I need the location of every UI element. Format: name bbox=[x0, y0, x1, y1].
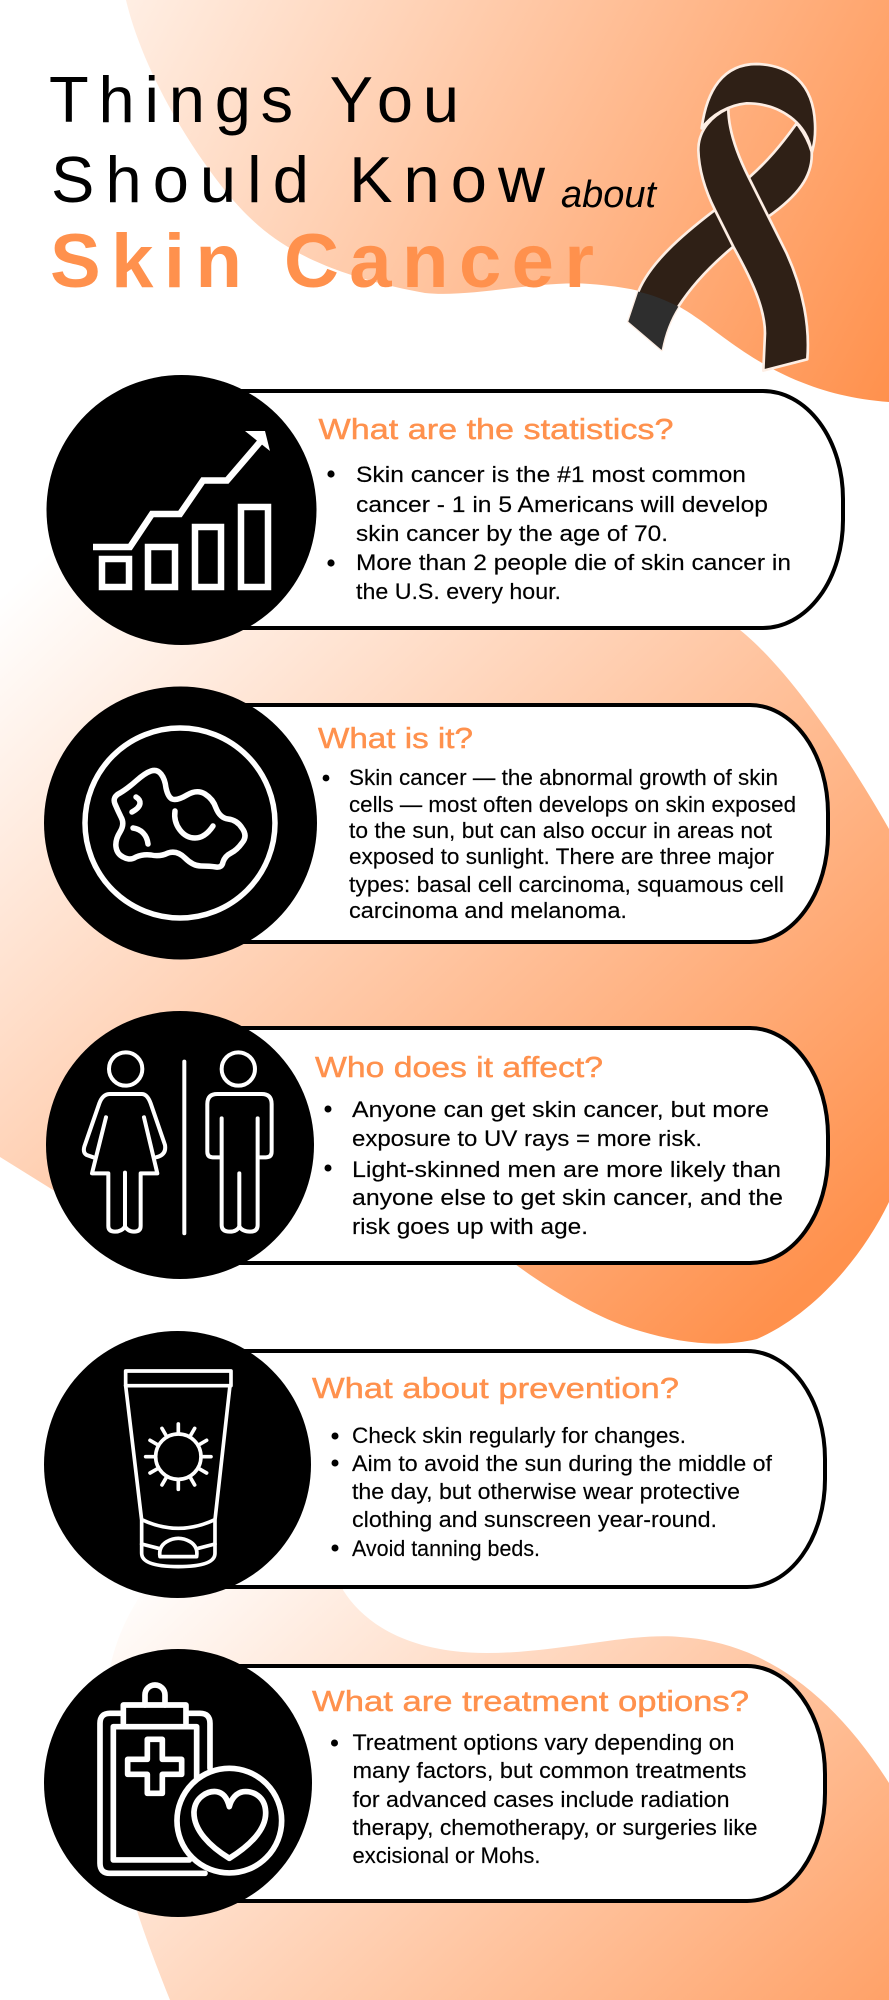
icon circle: skin lesion bbox=[44, 686, 317, 960]
bullet list: Avoid tanning beds. bbox=[352, 1536, 540, 1561]
bullet list: clothing and sunscreen year-round. bbox=[352, 1507, 717, 1532]
panel: prevention bbox=[44, 1331, 825, 1598]
bullet list bbox=[331, 1730, 758, 1868]
panel: statistics bbox=[46, 375, 843, 645]
card outline bbox=[100, 391, 843, 628]
bullet list: Skin cancer is the #1 most common bbox=[356, 462, 746, 487]
title: about bbox=[561, 174, 657, 216]
card outline bbox=[100, 1351, 825, 1587]
icon circle: clipboard and heart bbox=[44, 1649, 312, 1917]
bullet list: Check skin regularly for changes. bbox=[352, 1423, 686, 1448]
background blob: middle bbox=[0, 480, 889, 1344]
title: Things You bbox=[49, 63, 459, 136]
title: Should Know bbox=[51, 143, 546, 216]
title: Skin Cancer bbox=[50, 219, 594, 304]
card outline bbox=[100, 1666, 825, 1901]
bullet list: Anyone can get skin cancer, but more bbox=[352, 1097, 769, 1122]
bullet list: Light-skinned men are more likely than bbox=[352, 1157, 781, 1182]
bullet list bbox=[323, 765, 796, 923]
bullet list: cells — most often develops on skin exposed bbox=[349, 792, 796, 817]
bullet list: exposure to UV rays = more risk. bbox=[352, 1126, 702, 1151]
heading: Who does it affect? bbox=[315, 1052, 603, 1084]
panel: treatment options bbox=[44, 1649, 825, 1917]
bullet list: Treatment options vary depending on bbox=[352, 1730, 734, 1755]
bullet list: the U.S. every hour. bbox=[356, 579, 561, 604]
bullet list: More than 2 people die of skin cancer in bbox=[356, 550, 791, 575]
background blob: bottom bbox=[105, 1570, 889, 2000]
heading: What are treatment options? bbox=[312, 1686, 749, 1718]
bullet list: therapy, chemotherapy, or surgeries like bbox=[352, 1815, 758, 1840]
bullet list: skin cancer by the age of 70. bbox=[356, 521, 668, 546]
heading: What about prevention? bbox=[312, 1373, 679, 1405]
heading: What are the statistics? bbox=[318, 414, 674, 446]
bullet list: Aim to avoid the sun during the middle of bbox=[352, 1451, 773, 1476]
bullet list bbox=[327, 462, 791, 604]
bullet list: Skin cancer — the abnormal growth of skin bbox=[349, 765, 778, 790]
heading: What is it? bbox=[318, 723, 473, 755]
icon circle: growth chart bbox=[46, 375, 316, 645]
icon circle: sunscreen tube bbox=[44, 1331, 311, 1598]
bullet list: the day, but otherwise wear protective bbox=[352, 1479, 740, 1504]
card outline bbox=[100, 705, 828, 942]
panel: what is it bbox=[44, 686, 828, 960]
background blob: top bbox=[126, 0, 889, 402]
panel: who does it affect bbox=[46, 1011, 828, 1279]
bullet list: carcinoma and melanoma. bbox=[349, 898, 627, 923]
bullet list: anyone else to get skin cancer, and the bbox=[352, 1185, 783, 1210]
bullet list: types: basal cell carcinoma, squamous cell bbox=[349, 872, 784, 897]
bullet list: cancer - 1 in 5 Americans will develop bbox=[356, 492, 768, 517]
title bbox=[49, 63, 657, 304]
bullet list: many factors, but common treatments bbox=[352, 1758, 746, 1783]
bullet list: excisional or Mohs. bbox=[352, 1843, 540, 1868]
bullet list: risk goes up with age. bbox=[352, 1214, 588, 1239]
bullet list: exposed to sunlight. There are three major bbox=[349, 844, 774, 869]
bullet list bbox=[324, 1097, 783, 1239]
bullet list: for advanced cases include radiation bbox=[352, 1787, 730, 1812]
bullet list: to the sun, but can also occur in areas not bbox=[349, 818, 772, 843]
icon circle: woman and man bbox=[46, 1011, 314, 1279]
card outline bbox=[100, 1028, 828, 1263]
icon: awareness ribbon bbox=[628, 64, 815, 371]
bullet list bbox=[332, 1423, 773, 1561]
